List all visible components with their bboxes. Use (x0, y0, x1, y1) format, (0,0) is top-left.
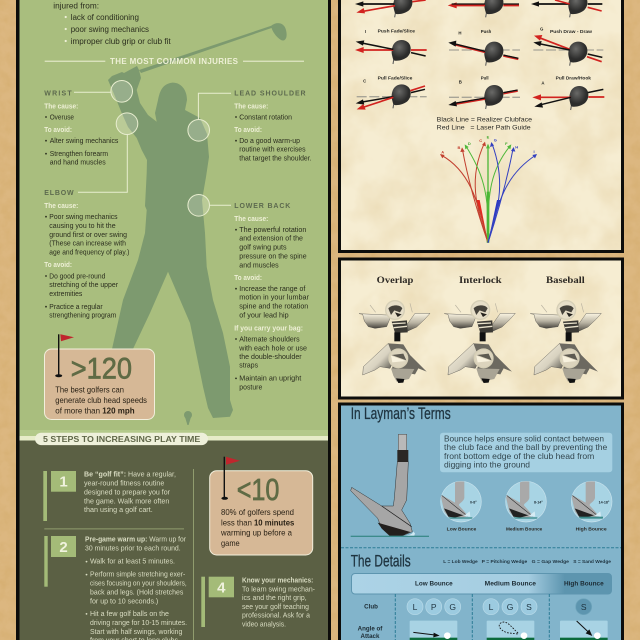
path labels: I (365, 29, 366, 34)
text block: wrist: Overuse (50, 114, 74, 121)
text block: wrist: WRIST (44, 90, 72, 97)
text block: lower back: the double-shoulder (239, 354, 302, 361)
heading pill: 5 STEPS TO INCREASING PLAY TIME (43, 434, 201, 444)
bounce comparison: high: High Bounce (576, 526, 607, 531)
text block: lower back: Increase the range of (239, 286, 305, 293)
path labels: H (458, 30, 462, 35)
icon: golf ball on tee (184, 411, 192, 425)
legend: wedge abbreviations (443, 559, 611, 565)
step 2: 30 minutes prior to each round. (85, 546, 181, 553)
step 4: To learn swing mechan- (242, 586, 316, 593)
path labels: Push Fade/Slice (378, 29, 416, 34)
trajectory letters: F (505, 141, 508, 146)
angle of attack: low bounce (410, 621, 457, 640)
legend: wedge abbreviations: S = Sand Wedge (573, 559, 611, 565)
text block: elbow: strengthening program (49, 313, 116, 320)
panel: wedge bounce (340, 404, 622, 640)
text block: elbow: stretching of the upper (49, 282, 119, 289)
step 1: 1 (59, 474, 68, 490)
text block: bounce explanation: digging into the ground (444, 460, 530, 470)
grip: interlock: Interlock (459, 276, 503, 286)
path labels: Push (481, 29, 492, 34)
text block: elbow: Do good pre-round (49, 273, 105, 280)
bounce comparison: low (440, 480, 481, 531)
path labels: Pull Fade/Slice (378, 76, 413, 81)
text block: lead shoulder (234, 90, 312, 163)
stat box: 120 mph: The best golfers can (55, 386, 124, 395)
step 2 (44, 536, 187, 640)
text block: elbow: age and frequency of play.) (49, 250, 129, 257)
path labels: G (540, 27, 544, 32)
text block: lower back: The cause: (234, 216, 268, 223)
table row labels: Attack (361, 633, 380, 640)
path labels: Pull (481, 76, 489, 81)
text block: lower back: motion in your lumbar (239, 295, 310, 302)
club letter badges: G (507, 602, 513, 612)
text block: elbow: The cause: (44, 203, 78, 210)
angle of attack: medium bounce (487, 621, 534, 640)
club letter badges (407, 599, 592, 615)
legend: wedge abbreviations: P = Pitching Wedge (482, 559, 528, 565)
panel: grip types (340, 259, 622, 398)
text block: wrist (44, 90, 119, 167)
text block: lower back: LOWER BACK (234, 203, 290, 210)
grip: overlap: Overlap (377, 276, 413, 286)
intro text: lack of conditioning (71, 13, 139, 22)
text block: lower back: Alternate shoulders (239, 336, 300, 343)
text block: lead shoulder: Do a good warm-up (239, 138, 300, 145)
text block: wrist: The cause: (44, 103, 78, 110)
callout markers and leader lines (74, 80, 231, 216)
text block: lower back: straps (239, 363, 258, 370)
bounce comparison: medium (505, 480, 546, 531)
stat box: 120 mph (44, 334, 154, 420)
text block: wrist: Alter swing mechanics (50, 138, 119, 145)
path labels: A (541, 81, 545, 86)
trajectory letters: A (441, 149, 444, 154)
step 4: ics and the right grip, (242, 595, 307, 602)
panel: clubface path diagrams (340, 0, 622, 252)
trajectory letters: D (468, 141, 471, 146)
text block: lower back: Maintain an upright (239, 376, 301, 383)
trajectory letters: B (458, 145, 461, 150)
step 1: Be “golf fit”: Have a regular, (84, 472, 176, 479)
text block: lower back: The powerful rotation (239, 227, 306, 234)
text block: wrist: To avoid: (44, 127, 72, 134)
stat box: 120 mph: of more than 120 mph (55, 406, 135, 415)
intro text: injured from: (53, 2, 99, 10)
bounce comparison: medium: Medium Bounce (506, 526, 543, 531)
text block: lower back: pressure on the spine (239, 253, 307, 260)
text block: lead shoulder: The cause: (234, 103, 268, 110)
panel: 5 steps to increasing play time (20, 430, 328, 640)
bounce comparison: low: 0-8° (470, 500, 477, 504)
stat box: under 10 minutes: 80% of golfers spend (221, 508, 294, 517)
text block: lower back: of your lead hip (239, 312, 289, 319)
step 1: year-round fitness routine (84, 480, 164, 487)
text block: lower back: with each hole or use (238, 345, 307, 352)
step 1: than using a golf cart. (84, 507, 153, 514)
row: push paths (355, 35, 603, 66)
text block: bounce explanation: Bounce helps ensure solid contact between (444, 433, 604, 443)
path labels (363, 27, 593, 86)
club letter badges: S (526, 602, 532, 612)
stat box: under 10 minutes: <10 (237, 472, 279, 507)
trajectory letters: C (479, 138, 482, 143)
panel: golf injuries (16, 0, 331, 640)
legend: wedge abbreviations: L = Lob Wedge (443, 559, 478, 565)
row: top clipped clubs (355, 0, 602, 17)
text block: elbow: (These can increase with (49, 241, 126, 248)
step 2: driving range for 10-15 minutes. (90, 620, 187, 627)
intro text (53, 2, 171, 46)
stat box: under 10 minutes: less than 10 minutes (221, 518, 295, 527)
text block: bounce explanation: the club face and the ball by preventing the (444, 442, 608, 452)
trajectory letters: I (533, 149, 535, 154)
text block: wrist: and hand muscles (50, 160, 106, 167)
step 2: for up to 10 seconds.) (90, 598, 158, 605)
step 1: the game. Walk more often (84, 498, 169, 505)
text block: lead shoulder: routine with exercises (239, 147, 306, 154)
step 2: cises focusing on your shoulders, (90, 581, 187, 588)
text block: lead shoulder: that target the shoulder. (239, 156, 312, 163)
trajectory letters (441, 134, 535, 154)
grip: interlock (444, 276, 515, 383)
trajectory letters: E (487, 134, 490, 139)
table row labels: Club (364, 604, 378, 610)
angle of attack: high bounce (560, 621, 608, 640)
text block: lower back: and muscles (239, 262, 279, 269)
step 4 (201, 577, 316, 629)
stat box: under 10 minutes: game (221, 539, 240, 548)
legend: line meanings (437, 117, 532, 131)
trajectory letters: G (494, 138, 497, 143)
table header band: Medium Bounce (485, 581, 536, 588)
table header band: High Bounce (564, 581, 604, 588)
club letter badges: G (449, 602, 456, 612)
text block: wrist: Strengthen forearm (50, 151, 108, 158)
step 4: 4 (217, 580, 226, 596)
stat box: 120 mph: >120 (71, 352, 132, 385)
intro text: improper club grip or club fit (71, 37, 171, 46)
path labels: Push Draw - Draw (550, 29, 593, 34)
diagrams: nine club paths (355, 0, 604, 110)
text block: lower back: and extension of the (239, 236, 303, 243)
stat box: under 10 minutes (210, 457, 313, 555)
grip: baseball (530, 276, 601, 383)
step 1: designed to prepare you for (84, 489, 171, 496)
text block: lead shoulder: Constant rotation (239, 114, 292, 121)
heading: in layman's terms: In Layman’s Terms (351, 405, 451, 423)
step 2: Perform simple stretching exer- (90, 572, 186, 579)
text block: elbow (44, 190, 129, 320)
text block: elbow: causing you to hit the (49, 223, 116, 230)
bounce comparison: high (571, 480, 612, 531)
text block: lower back: posture (239, 385, 262, 392)
row: pull paths (356, 84, 604, 110)
bounce comparison: high: 14-18° (599, 500, 610, 504)
text block: bounce explanation: front bottom edge of the club head from (444, 451, 594, 461)
step 2: Hit a few golf balls on the (90, 611, 169, 618)
legend: line meanings: Black Line = Realizer Clubface (437, 117, 532, 124)
text block: elbow: ELBOW (44, 190, 74, 197)
text block: elbow: Poor swing mechanics (49, 214, 118, 221)
icon: flag (55, 334, 74, 377)
table row labels: Angle of (358, 626, 383, 633)
intro text: poor swing mechanics (71, 25, 149, 34)
heading: the most common injuries: THE MOST COMMON INJURIES (110, 57, 239, 66)
step 2: Pre-game warm up: Warm up for (85, 537, 187, 544)
step 2: Start with half swings, working (90, 629, 182, 636)
text block: elbow: extremities (49, 291, 83, 298)
text block: lower back: If you carry your bag: (234, 326, 303, 333)
step 4: professional. Ask for a (242, 613, 310, 620)
step 4: video analysis. (242, 622, 286, 629)
grip: overlap (359, 276, 430, 383)
table header band (352, 574, 612, 594)
text block: lower back: golf swing puts (239, 245, 287, 252)
step 2: 2 (59, 539, 68, 556)
silhouette: golfer swinging a club (108, 23, 287, 418)
heading: the details: The Details (351, 553, 411, 571)
text block: lead shoulder: To avoid: (234, 127, 262, 134)
text block: elbow: Practice a regular (49, 304, 103, 311)
trajectory letters: H (515, 145, 518, 150)
path labels: C (363, 79, 366, 84)
bounce comparison: medium: 8-14° (534, 500, 543, 504)
table header band: Low Bounce (415, 581, 453, 588)
step 2: Walk for at least 5 minutes. (90, 559, 175, 566)
chart: ball flight fan (440, 134, 537, 243)
club letter badges: L (489, 602, 494, 612)
illustration: wedge club (351, 434, 429, 537)
path labels: Pull Draw/Hook (556, 76, 592, 81)
stat box: 120 mph: generate club head speeds (55, 396, 147, 405)
club letter badges: L (413, 602, 418, 612)
text block: elbow: To avoid: (44, 262, 72, 269)
text block: elbow: ground first or over swing (49, 232, 127, 239)
legend: line meanings: Red Line = Laser Path Guide (437, 124, 531, 131)
club letter badges: P (431, 602, 437, 612)
stat box: under 10 minutes: warming up before a (220, 529, 292, 538)
grip: baseball: Baseball (546, 276, 585, 286)
club letter badges: S (581, 602, 587, 612)
text block: bounce explanation (440, 433, 612, 472)
bounce comparison: low: Low Bounce (447, 526, 477, 531)
path labels: B (459, 79, 462, 84)
table row labels (358, 604, 383, 640)
icon: flag (221, 457, 240, 500)
text block: lower back: spine and the rotation (239, 304, 308, 311)
text block: lower back (234, 203, 310, 392)
step 2: back and legs. (Hold stretches (90, 589, 184, 596)
text block: lower back: To avoid: (234, 275, 262, 282)
step 1 (43, 471, 176, 521)
text block: lead shoulder: LEAD SHOULDER (234, 90, 306, 97)
step 4: see your golf teaching (242, 604, 309, 611)
step 4: Know your mechanics: (242, 577, 313, 584)
legend: wedge abbreviations: G = Gap Wedge (532, 559, 569, 565)
